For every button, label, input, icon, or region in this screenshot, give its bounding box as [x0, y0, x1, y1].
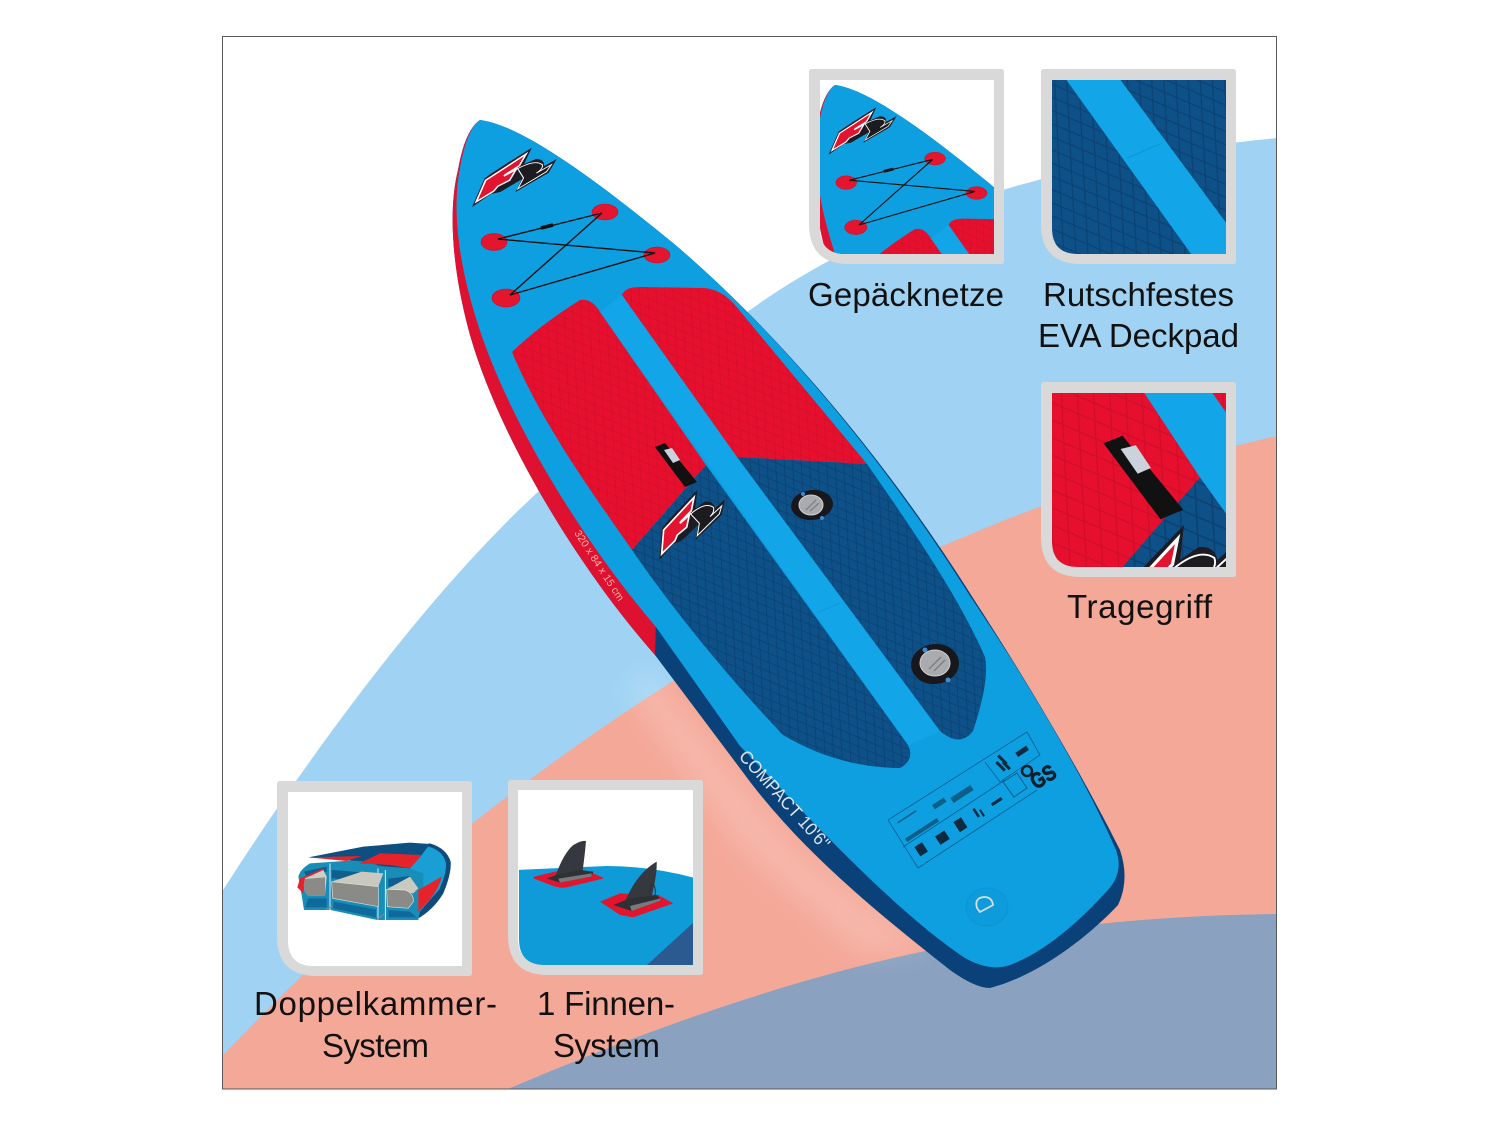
navy deck pad right — [737, 457, 986, 740]
fin photo — [515, 841, 695, 970]
bungee cord — [498, 213, 655, 295]
red deck pad right — [622, 287, 867, 464]
panel: Deckpad — [1041, 69, 1236, 264]
infographic canvas — [222, 36, 1277, 1090]
top F2 logo — [472, 144, 560, 214]
rear valve — [909, 642, 961, 686]
middle F2 logo — [659, 490, 725, 560]
caption: 1 Finnen-System: 1 Finnen- — [537, 985, 675, 1022]
rear D-ring — [966, 888, 1008, 926]
paddle board — [453, 120, 1125, 988]
board deck — [457, 120, 1119, 967]
board model text: COMPACT 10'6" — [735, 746, 834, 853]
caption: 1 Finnen-System — [537, 985, 675, 1064]
panel: Tragegriff — [1041, 382, 1236, 577]
chamber cross-section — [297, 843, 451, 920]
GS mark text: GS — [1025, 759, 1061, 794]
panel: Gepaecknetze — [809, 69, 1004, 264]
deckpad close-up — [1050, 78, 1230, 258]
panel: Doppelkammer — [277, 781, 472, 976]
caption: Doppelkammer-System: System — [322, 1027, 429, 1064]
caption: Doppelkammer-System — [254, 985, 497, 1064]
front valve — [790, 488, 834, 522]
caption: Rutschfestes EVA Deckpad: EVA Deckpad — [1038, 317, 1239, 354]
bungee D-ring patches — [481, 204, 670, 307]
frame border — [222, 36, 1276, 1089]
safety label — [888, 732, 1040, 868]
board side navy — [453, 120, 1125, 988]
centre strip — [600, 295, 940, 745]
panel: Finnen-System — [508, 780, 703, 975]
GS ring mark — [1022, 766, 1032, 776]
caption: Rutschfestes EVA Deckpad: Rutschfestes — [1043, 276, 1234, 313]
caption: Gepaecknetze: Gepäcknetze — [808, 276, 1004, 313]
caption: Rutschfestes EVA Deckpad — [1038, 276, 1239, 354]
board side red — [453, 120, 656, 655]
navy deck pad left — [632, 465, 910, 768]
handle close-up — [1052, 393, 1226, 567]
caption: Tragegriff: Tragegriff — [1067, 588, 1213, 625]
caption: 1 Finnen-System: System — [553, 1027, 660, 1064]
red deck pad left — [512, 300, 706, 550]
caption: Doppelkammer-System: Doppelkammer- — [254, 985, 497, 1022]
background curved bands — [223, 37, 1277, 1089]
strip seam — [817, 603, 840, 613]
carry handle — [655, 443, 697, 487]
board size text: 320 x 84 x 15 cm — [571, 528, 626, 604]
